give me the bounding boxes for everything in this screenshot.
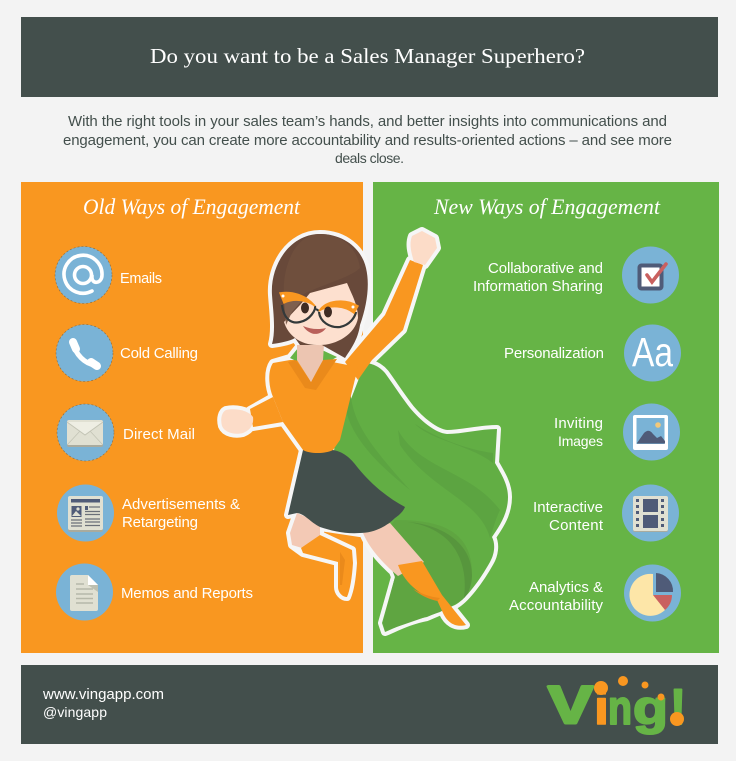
front leg: [290, 513, 353, 597]
item: memos: [56, 564, 253, 620]
icon: typography: Aa: [632, 329, 673, 375]
fists: [221, 231, 437, 434]
icon: envelope: [57, 404, 114, 461]
title banner: [21, 17, 718, 97]
item: analytics: [509, 564, 681, 622]
icon: pie chart: [624, 564, 681, 622]
item: analytics: Analytics &: [529, 579, 603, 596]
logo: ving: !: [670, 679, 686, 735]
eyes: [301, 302, 332, 318]
footer banner: @vingapp: [43, 704, 107, 720]
left arm: [250, 397, 283, 427]
hair: [272, 234, 368, 358]
item: emails: Emails: [120, 271, 162, 287]
back leg: [363, 523, 466, 626]
heading: old ways: Old Ways of Engagement: [83, 194, 301, 219]
item: interactive content: Content: [549, 517, 604, 534]
item: images: Images: [558, 433, 603, 449]
logo: ving: g: [633, 682, 668, 735]
panel: new ways: [373, 182, 719, 653]
item: images: [554, 404, 680, 460]
collar: [288, 343, 337, 390]
superhero character: [221, 231, 508, 632]
item: direct mail: Direct Mail: [123, 426, 195, 443]
logo: ving: i: [594, 682, 609, 735]
icon: typography: [624, 324, 681, 382]
white outline silhouette: [221, 231, 508, 632]
cape: [330, 363, 508, 632]
hair through lens: [284, 296, 306, 325]
intro text: [63, 113, 672, 166]
icon: film strip: [622, 484, 679, 542]
item: advertisements: Retargeting: [122, 514, 198, 531]
item: collaborative: Collaborative and: [488, 260, 603, 277]
item: memos: Memos and Reports: [121, 585, 253, 602]
logo: ving: [548, 676, 686, 735]
right arm: [345, 260, 423, 380]
item: advertisements: Advertisements &: [122, 496, 240, 513]
item: cold calling: Cold Calling: [120, 345, 198, 362]
item: direct mail: [57, 404, 195, 461]
intro text: engagement, you can create more accountability and results-oriented actions – and see more: [63, 132, 672, 149]
item: images: Inviting: [554, 415, 603, 432]
icon: at sign: [55, 246, 112, 304]
item: advertisements: [57, 484, 240, 542]
footer banner: www.vingapp.com: [42, 686, 164, 703]
item: interactive content: Interactive: [533, 499, 603, 516]
item: interactive content: [533, 484, 679, 542]
item: personalization: Personalization: [504, 345, 604, 362]
intro text: With the right tools in your sales team’s hands, and better insights into communications and: [68, 113, 667, 130]
heading: new ways: New Ways of Engagement: [433, 194, 661, 219]
mouth: [303, 326, 326, 334]
panel: old ways: [21, 182, 363, 653]
torso: [269, 360, 358, 453]
item: emails: [55, 246, 162, 304]
icon: newspaper: [57, 484, 114, 542]
icon: phone: [56, 324, 113, 382]
face: [284, 283, 358, 345]
icon: document: [56, 564, 113, 620]
logo: ving: n: [608, 682, 632, 735]
logo: ving: V: [548, 676, 593, 735]
icon: checkbox: [622, 246, 679, 304]
item: collaborative: Information Sharing: [473, 278, 603, 295]
title banner: Do you want to be a Sales Manager Superhero?: [150, 44, 585, 68]
item: cold calling: [56, 324, 198, 382]
intro text: deals close.: [335, 150, 404, 166]
skirt: [288, 450, 405, 533]
footer banner: [21, 665, 718, 744]
glasses: [280, 293, 358, 327]
item: analytics: Accountability: [509, 597, 604, 614]
icon: picture: [623, 404, 680, 460]
item: collaborative: [473, 246, 679, 304]
item: personalization: [504, 324, 681, 382]
